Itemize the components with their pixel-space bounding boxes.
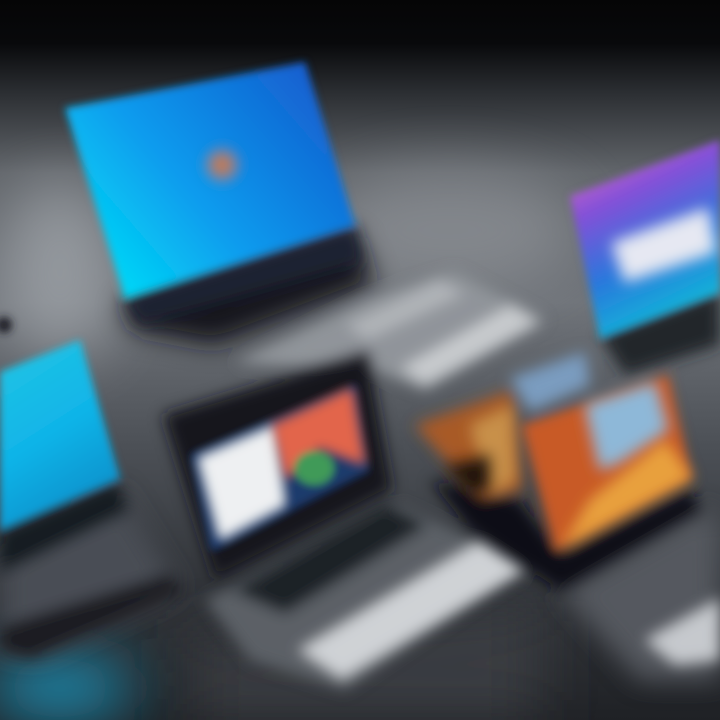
laptop: right with purple screen xyxy=(570,140,720,375)
blue tab at top xyxy=(510,352,590,412)
screen xyxy=(0,340,120,530)
keyboard highlight strip xyxy=(400,305,538,384)
red area xyxy=(272,388,365,480)
green shape xyxy=(294,451,334,485)
screen bezel xyxy=(122,224,364,325)
laptop: left edge with cyan screen xyxy=(0,317,185,658)
screen xyxy=(570,140,720,338)
orange highlight xyxy=(560,440,692,550)
back screen, orange and brown xyxy=(415,390,522,500)
front screen xyxy=(522,375,692,552)
white touch pad xyxy=(645,598,720,665)
white area xyxy=(198,425,285,540)
white window on screen xyxy=(612,208,716,282)
laptop: top left with blue screen xyxy=(65,62,545,390)
sky blue panel xyxy=(585,382,668,470)
dark keys xyxy=(235,505,425,612)
keyboard deck xyxy=(205,505,528,690)
blue edge of screen xyxy=(192,385,368,550)
orange dot on screen xyxy=(208,151,236,179)
white touch pad xyxy=(298,540,525,680)
laptop: right with orange screen xyxy=(415,352,720,680)
base xyxy=(0,490,180,655)
keyboard deck xyxy=(560,510,720,680)
bezel shadow xyxy=(600,290,720,375)
dark base xyxy=(430,480,700,590)
hinge dot xyxy=(0,317,12,333)
laptop: centre with colourful screen xyxy=(163,352,528,690)
blue screen xyxy=(65,62,355,298)
laptop base shadow xyxy=(120,235,375,345)
keyboard deck, light grey xyxy=(235,272,545,390)
dark frame xyxy=(163,352,392,580)
